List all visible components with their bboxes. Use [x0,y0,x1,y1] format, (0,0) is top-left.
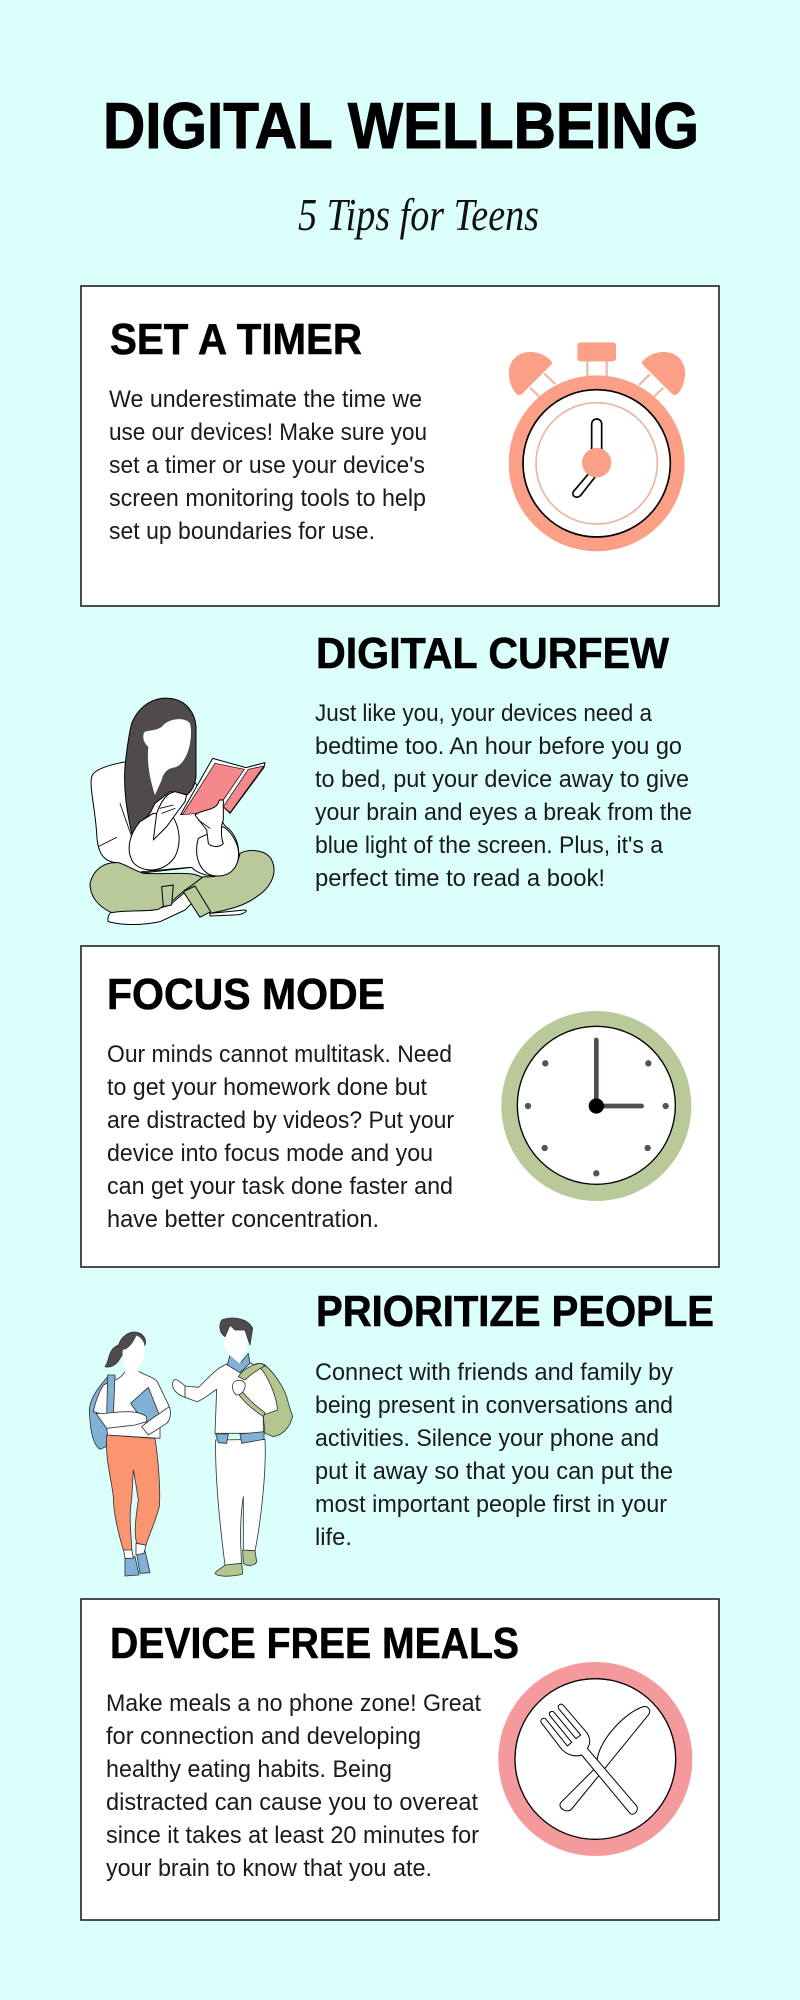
text block: device free meals [106,1690,481,1882]
text block: focus mode: to get your homework done but [107,1074,427,1101]
text block: device free meals: healthy eating habits. Being [106,1756,392,1783]
text block: prioritize people: activities. Silence your phone and [315,1425,659,1452]
title: DIGITAL WELLBEING [103,89,699,162]
heading: device free meals: DEVICE FREE MEALS [110,1619,519,1668]
text block: digital curfew: bedtime too. An hour before you go [315,733,682,760]
heading: digital curfew: DIGITAL CURFEW [316,629,669,678]
panel: focus mode [81,946,719,1267]
heading: set a timer: SET A TIMER [110,315,362,364]
text block: prioritize people [315,1359,673,1551]
text block: prioritize people: being present in conversations and [315,1392,673,1419]
text block: device free meals: for connection and developing [106,1723,421,1750]
text block: device free meals: since it takes at least 20 minutes for [106,1822,479,1849]
text block: device free meals: Make meals a no phone zone! Great [106,1690,481,1717]
icon: plate with fork and knife [498,1662,692,1856]
icon: girl reading a book [90,698,274,925]
panel: set a timer [81,286,719,606]
text block: focus mode: are distracted by videos? Put your [107,1107,454,1134]
subtitle: 5 Tips for Teens [298,189,539,240]
text block: digital curfew: your brain and eyes a break from the [315,799,692,826]
text block: prioritize people: life. [315,1524,352,1551]
text block: prioritize people: most important people first in your [315,1491,667,1518]
text block: focus mode [107,1041,454,1233]
panel: digital curfew [90,629,692,925]
icon: stopwatch [509,342,685,551]
text block: focus mode: can get your task done faster and [107,1173,453,1200]
text block: prioritize people: Connect with friends and family by [315,1359,673,1386]
icon: wall clock [501,1011,691,1201]
icon: two students talking [89,1318,293,1576]
text block: set a timer: use our devices! Make sure you [109,419,427,446]
text block: focus mode: Our minds cannot multitask. Need [107,1041,452,1068]
text block: device free meals: distracted can cause you to overeat [106,1789,478,1816]
text block: digital curfew [315,700,692,892]
text block: digital curfew: perfect time to read a book! [315,865,605,892]
heading: focus mode: FOCUS MODE [107,970,385,1019]
text block: set a timer [109,386,427,545]
text block: focus mode: device into focus mode and you [107,1140,433,1167]
text block: digital curfew: blue light of the screen. Plus, it's a [315,832,664,859]
panel: device free meals [81,1599,719,1920]
text block: digital curfew: Just like you, your devices need a [315,700,653,727]
text block: prioritize people: put it away so that you can put the [315,1458,673,1485]
text block: device free meals: your brain to know that you ate. [106,1855,432,1882]
text block: set a timer: set up boundaries for use. [109,518,375,545]
text block: focus mode: have better concentration. [107,1206,379,1233]
text block: set a timer: We underestimate the time we [109,386,422,413]
panel: prioritize people [89,1287,714,1576]
text block: set a timer: set a timer or use your device's [109,452,425,479]
heading: prioritize people: PRIORITIZE PEOPLE [316,1287,714,1336]
text block: digital curfew: to bed, put your device away to give [315,766,689,793]
text block: set a timer: screen monitoring tools to help [109,485,426,512]
